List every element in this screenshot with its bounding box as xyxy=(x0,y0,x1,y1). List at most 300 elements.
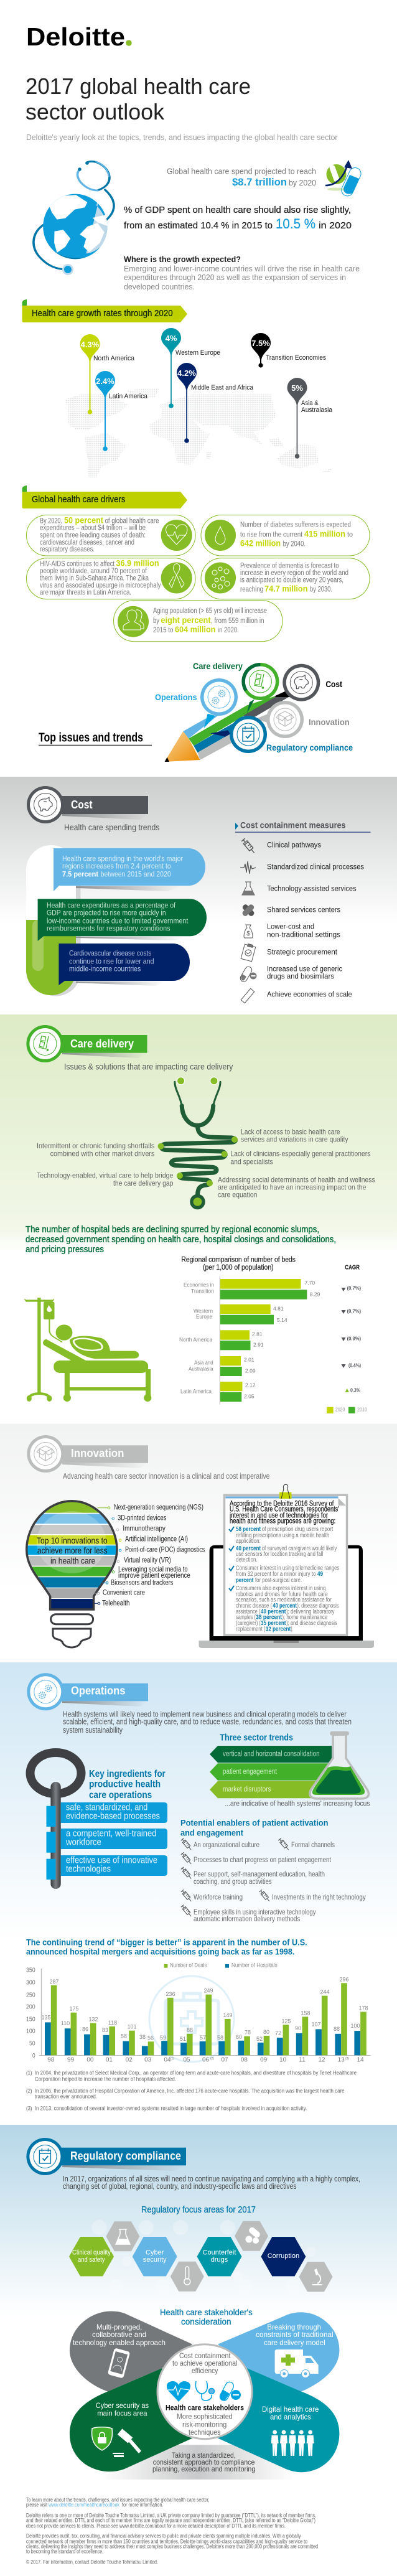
list: top 10 innovations with connectors: Next-generation sequencing (NGS) xyxy=(114,1504,203,1512)
icon: patient in hospital bed xyxy=(24,1298,151,1402)
survey bullet: robotics and drones: ); delivering laboratory xyxy=(286,1609,335,1616)
card: HIV-AIDS: are major threats in Latin America. xyxy=(40,589,131,597)
value labels: 175 xyxy=(69,2006,79,2012)
callout: cardiovascular disease costs: Cardiovascular disease costs xyxy=(69,950,152,958)
callout: expenditures as percentage of GDP: GDP are projected to rise more quickly in xyxy=(47,910,166,917)
hexagon: cyber security: security xyxy=(143,2256,167,2264)
callout: regional spending xyxy=(54,848,205,891)
value labels: 2.05 xyxy=(244,1393,255,1400)
panel: Regulatory compliance xyxy=(0,2125,397,2480)
value labels: 86 xyxy=(82,2026,88,2033)
subheading: issues and solutions: Issues & solutions that are impacting care delivery xyxy=(64,1062,233,1072)
list heading: Cost containment measures xyxy=(240,820,346,830)
heading: hospital beds: and pricing pressures xyxy=(26,1245,104,1255)
survey bullet: telemedicine: 49 xyxy=(317,1571,323,1578)
footnotes: (3) xyxy=(26,2105,32,2111)
callout: expenditures as percentage of GDP xyxy=(38,899,207,941)
survey bullet: robotics and drones: ); disease diagnosis xyxy=(297,1603,339,1609)
footer: disclaimer text: Deloitte refers to one or more of Deloitte Touche Tohmatsu Limited, a UK private company limited by guarantee ("DTTL"), its network of member firms, xyxy=(26,2513,316,2519)
survey bullet: telemedicine: percent xyxy=(236,1577,254,1584)
card: dementia: Prevalence of dementia is forecast to xyxy=(240,563,339,570)
value labels xyxy=(41,1976,368,2042)
hexagon: cyber security: Cyber xyxy=(146,2249,164,2256)
badge: Regulatory compliance xyxy=(230,716,267,753)
value labels: 107 xyxy=(311,2021,321,2027)
item: technology-assisted services: Technology-assisted services xyxy=(267,886,357,893)
hexagon: counterfeit drugs xyxy=(197,2237,241,2276)
section header: Cost: Cost xyxy=(71,799,93,811)
value labels: 52 xyxy=(256,2036,263,2042)
text: GDP statement: % of GDP spent on health care should also rise slightly, xyxy=(124,205,351,215)
card: diabetes xyxy=(201,515,370,556)
pin: Latin America 2.4%: Latin America xyxy=(109,393,148,400)
value labels: 132 xyxy=(88,2016,98,2023)
icon: gavel xyxy=(113,2428,141,2457)
icon: ambulance xyxy=(275,2349,319,2377)
callout: cardiovascular disease costs: continue to rise for lower and xyxy=(69,958,154,965)
heading: hospital beds: The number of hospital beds are declining spurred by regional economic slumps, xyxy=(26,1225,319,1235)
survey bullet: robotics and drones: 35 percent xyxy=(261,1620,286,1627)
logo: Deloitte: Deloitte xyxy=(26,22,125,51)
callout: cardiovascular disease costs xyxy=(58,944,190,986)
item: shared services centers xyxy=(241,904,340,917)
heading ribbon: drivers: Global health care drivers xyxy=(32,494,126,505)
hexagon: corruption xyxy=(261,2237,306,2276)
list items xyxy=(181,1838,366,1923)
callout: expenditures as percentage of GDP: Health care expenditures as a percentage of xyxy=(47,902,176,910)
text: regulatory intro xyxy=(63,2175,360,2191)
CAGR values: (0.7%) xyxy=(347,1286,361,1291)
footnotes: transaction ever announced. xyxy=(35,2094,97,2100)
category labels: Asia and xyxy=(194,1360,213,1367)
item: lower-cost settings xyxy=(244,924,340,939)
text: spend projection: $8.7 trillion xyxy=(232,176,287,188)
card: dementia: is anticipated to double every 20 years, xyxy=(240,577,343,584)
section header: Care delivery xyxy=(26,1025,147,1062)
card: dementia: 74.7 million xyxy=(264,584,307,594)
text: stethoscope callouts: and specialists xyxy=(230,1158,273,1166)
item: clinical pathways xyxy=(241,838,321,855)
survey bullet: 40 percent: of surveyed caregivers would likely xyxy=(262,1545,337,1552)
footer: disclaimer text: to becoming the standard of excellence. xyxy=(26,2549,103,2555)
card: HIV-AIDS: them living in Sub-Sahara Africa. The Zika xyxy=(40,575,149,583)
y axis xyxy=(26,1967,35,2059)
survey bullet: robotics and drones: robotics and drones for future health care xyxy=(236,1591,328,1598)
lobe: cyber security focus: main focus area xyxy=(97,2409,147,2418)
subtitle: Deloitte's yearly look at the topics, trends, and issues impacting the global health care sector xyxy=(26,133,338,142)
card: causes of death: respiratory diseases. xyxy=(40,546,95,553)
panel: Care delivery xyxy=(0,1014,397,1424)
pin: Middle East and Africa 4.2%: Middle East and Africa xyxy=(191,384,254,391)
list items: Investments in the right technology xyxy=(272,1894,366,1901)
badge: Innovation xyxy=(266,701,304,738)
list: top 10 innovations with connectors: Point-of-care (POC) diagnostics xyxy=(125,1547,205,1554)
card: HIV-AIDS xyxy=(26,558,195,599)
text: standardized approach: planning, execution and monitoring xyxy=(152,2465,255,2473)
title: sector outlook xyxy=(26,99,165,124)
list: top 10 innovations with connectors: improve patient experience xyxy=(118,1572,190,1580)
bars: number of deals xyxy=(51,1983,367,2055)
labels for the five topics xyxy=(155,661,353,752)
survey bullet: robotics and drones: Consumers also express interest in using xyxy=(236,1585,325,1592)
item: generics: drugs and biosimilars xyxy=(267,973,334,981)
pin: Western Europe 4%: Western Europe xyxy=(175,349,220,357)
illustration: winding stethoscope xyxy=(158,1077,238,1209)
pin: North America 4.3%: North America xyxy=(93,355,135,362)
item: strategic procurement: Strategic procurement xyxy=(267,949,338,957)
heading: bigger is better xyxy=(26,1937,307,1957)
icon hexagon: flask xyxy=(106,2221,139,2251)
value labels: 4.81 xyxy=(273,1306,284,1312)
card: dementia: by 2030. xyxy=(310,586,332,594)
survey bullet: robotics and drones: ); home maintenance xyxy=(283,1614,327,1621)
CAGR values xyxy=(341,1286,361,1393)
icon: flask xyxy=(310,1731,368,1799)
arrow: patient engagement: patient engagement xyxy=(223,1768,278,1776)
pin: Asia and Australasia 5%: 5% xyxy=(291,383,303,393)
centre circle: health care stakeholders xyxy=(157,2344,252,2439)
category labels xyxy=(179,1282,214,1395)
lobe: multi-pronged approach xyxy=(73,2323,166,2379)
chart title: Regional comparison of number of beds xyxy=(181,1257,296,1264)
list: potential enablers xyxy=(180,1818,366,1923)
survey bullet: robotics and drones: ). xyxy=(291,1626,293,1633)
badge: Cost xyxy=(283,664,320,701)
text: standardized approach: Taking a standardized, xyxy=(172,2451,235,2460)
lobe: cyber security focus: Cyber security as xyxy=(96,2401,149,2410)
list items: Workforce training xyxy=(194,1894,243,1901)
infographic: three sector trends: ...are indicative of health systems' increasing focus xyxy=(225,1799,370,1808)
heading ribbon: growth rates: Health care growth rates through 2020 xyxy=(32,308,173,319)
x axis: 13 xyxy=(338,2057,345,2064)
x axis: 12 xyxy=(318,2057,325,2064)
text: GDP statement: from an estimated 10.4 % in 2015 to xyxy=(124,220,273,231)
value labels: 178 xyxy=(358,2005,368,2012)
x axis: (3) xyxy=(345,2057,349,2061)
x axis: 04 xyxy=(164,2057,171,2064)
arrow: market disruptors xyxy=(210,1781,332,1798)
value labels: 58 xyxy=(217,2035,223,2041)
pin: North America 4.3%: 4.3% xyxy=(81,340,100,349)
value labels: 2.09 xyxy=(245,1368,256,1374)
text: regulatory intro: changing set of global, regional, country, and industry-specific laws and directives xyxy=(63,2182,297,2191)
y axis: 300 xyxy=(26,1979,35,1987)
card: aging population: in 2020. xyxy=(218,627,239,634)
diagram: health care stakeholder's consideration xyxy=(70,2307,339,2480)
illustration: pencil with five topic badges xyxy=(155,661,353,762)
value labels: 158 xyxy=(301,2010,311,2016)
pin: Asia and Australasia 5% xyxy=(287,378,333,459)
tag: processes: safe, standardized, and xyxy=(66,1802,147,1812)
value labels: 244 xyxy=(320,1989,330,1995)
text: stethoscope callouts xyxy=(37,1128,375,1199)
tag: processes xyxy=(46,1802,167,1827)
value labels: 118 xyxy=(108,2020,117,2026)
footer: disclaimer text xyxy=(26,2497,318,2565)
value labels: 88 xyxy=(334,2026,340,2032)
icon: heart xyxy=(167,2381,190,2402)
category labels: North America xyxy=(179,1337,213,1344)
icon: shield with padlock xyxy=(92,2427,112,2450)
card heading: According to the Deloitte 2016 Survey of xyxy=(230,1500,334,1507)
section header: Operations: Operations xyxy=(71,1685,126,1697)
footer: disclaimer text: does not provide services to clients. Please see www.deloitte.com/about for a more detailed description of DTTL and its member firms. xyxy=(26,2523,286,2529)
value labels: 125 xyxy=(281,2018,291,2024)
text: standardized approach: consistent approach to compliance xyxy=(153,2458,255,2466)
category labels: Latin America xyxy=(180,1389,212,1395)
card: aging population: 604 million xyxy=(175,624,215,634)
heading: bigger is better: announced hospital mergers and acquisitions going back as far as 1998. xyxy=(26,1947,294,1957)
labels for the five topics: Operations xyxy=(155,692,197,702)
item: lower-cost settings: non-traditional settings xyxy=(267,932,340,939)
heading: top issues and trends: Top issues and trends xyxy=(39,731,143,745)
callout: regional spending: 7.5 percent xyxy=(62,871,98,879)
value labels: 78 xyxy=(245,2030,251,2036)
text: spend projection: Global health care spend projected to reach xyxy=(167,167,316,176)
pin: Western Europe 4% xyxy=(161,328,220,408)
footnotes: In 2006, the privatization of Hospital Corporation of America, Inc. affected 176 acute-care hospitals. The acquisition was the largest health care xyxy=(35,2087,345,2094)
list heading: Potential enablers of patient activation xyxy=(180,1818,329,1828)
survey bullet: 40 percent: use sensors for location tracking and fall xyxy=(236,1551,323,1558)
text: stethoscope callouts: Intermittent or chronic funding shortfalls xyxy=(37,1141,154,1150)
centre circle: health care stakeholders: risk-monitoring xyxy=(182,2420,227,2428)
card: diabetes: to xyxy=(347,532,353,539)
card: aging population: Aging population (> 65 yrs old) will increase xyxy=(153,607,267,615)
x axis: 05 xyxy=(183,2057,190,2064)
value labels: 149 xyxy=(223,2012,233,2018)
heading: key ingredients: productive health xyxy=(89,1779,161,1790)
value labels: 57 xyxy=(200,2035,206,2041)
lobe: breaking through constraints: care delivery model xyxy=(264,2338,325,2347)
value labels: 51 xyxy=(180,2036,186,2042)
subheading: spending trends: Health care spending trends xyxy=(64,822,159,832)
footer: disclaimer text: connected network of member firms in more than 150 countries and territories, Deloitte brings world-class capabilities and high-quality service to xyxy=(26,2539,307,2545)
survey bullet: 58 percent: refilling prescriptions using a mobile health xyxy=(236,1532,329,1539)
y axis: 350 xyxy=(26,1967,35,1974)
value labels: 2.12 xyxy=(245,1382,256,1389)
icon: pill with arrow xyxy=(325,160,363,198)
lobe: multi-pronged approach: collaborative and xyxy=(92,2330,146,2339)
list: top 10 innovations with connectors: 3D-printed devices xyxy=(118,1515,167,1522)
tag: processes: evidence-based processes xyxy=(66,1812,160,1822)
x axis: 10 xyxy=(279,2057,287,2064)
category labels: Western xyxy=(194,1308,213,1315)
card: HIV-AIDS: virus and associated upsurge in microcephaly xyxy=(40,582,161,589)
survey bullet: robotics and drones: chronic disease ( xyxy=(236,1603,273,1609)
value labels: 88 xyxy=(187,2027,193,2033)
arrow: consolidation: vertical and horizontal consolidation xyxy=(223,1751,320,1758)
list: top 10 innovations with connectors xyxy=(95,1504,205,1607)
text: where is the growth expected: expenditures through 2020 as well as the expansion of services in xyxy=(124,273,346,282)
footnotes: Corporation helped to increase the number of hospitals affected. xyxy=(35,2076,176,2082)
value labels: 8.29 xyxy=(310,1291,320,1298)
badge: Operations xyxy=(200,678,238,716)
x axis xyxy=(47,2057,364,2064)
x axis: 01 xyxy=(106,2057,113,2064)
text: operating models intro: Health systems will likely need to implement new business and clinical operating models to deliver xyxy=(63,1710,347,1719)
survey bullet: robotics and drones: scenarios, such as medication assistance for xyxy=(236,1597,332,1604)
item: technology-assisted services xyxy=(242,882,357,895)
item: generics xyxy=(239,965,342,983)
y axis: 200 xyxy=(26,2004,35,2010)
value labels: 2.01 xyxy=(244,1357,255,1363)
pin: Western Europe 4%: 4% xyxy=(166,334,177,343)
footer: disclaimer text: for more information. xyxy=(122,2502,163,2508)
text: where is the growth expected: developed countries. xyxy=(124,282,195,291)
pin: Transition Economies 7.5% xyxy=(251,333,326,368)
card heading xyxy=(230,1500,339,1525)
section header: Innovation: Innovation xyxy=(71,1447,124,1459)
legend: 2010 xyxy=(357,1407,367,1413)
pin: Asia and Australasia 5%: Asia & xyxy=(301,400,319,407)
legend: 2020 xyxy=(335,1407,345,1413)
footer: disclaimer text: www.deloitte.com/healthcareoutlook xyxy=(48,2502,119,2508)
list: cost containment measures xyxy=(235,820,371,1003)
icon: binder clip xyxy=(279,1484,291,1499)
callout: regional spending: regions increases from 2.4 percent to xyxy=(62,863,171,871)
value labels: 100 xyxy=(350,2023,360,2029)
footer: disclaimer text: please visit xyxy=(26,2502,47,2508)
text: spend projection xyxy=(167,167,316,188)
chart title: CAGR xyxy=(345,1264,360,1271)
bars: number of hospitals xyxy=(45,2022,360,2055)
card: HIV-AIDS: HIV-AIDS continues to affect xyxy=(40,560,115,568)
lobe: digital health care and analytics: Digital health care xyxy=(262,2405,319,2414)
centre circle: health care stakeholders: Health care stakeholders xyxy=(166,2404,244,2412)
illustration: light bulb of top 10 innovations: Top 10 innovations to xyxy=(37,1535,108,1545)
infographic: three sector trends xyxy=(210,1731,370,1808)
list: top 10 innovations with connectors: Artificial intelligence (AI) xyxy=(125,1536,188,1543)
x axis: 98 xyxy=(47,2057,55,2064)
item: clinical pathways: Clinical pathways xyxy=(267,842,321,850)
x axis: 08 xyxy=(241,2057,248,2064)
chart title: (per 1,000 of population) xyxy=(203,1264,274,1272)
category labels: Economies in xyxy=(184,1282,214,1289)
pin: Middle East and Africa 4.2% xyxy=(177,363,254,443)
survey bullet: 58 percent: of prescription drug users report xyxy=(262,1526,333,1533)
list items: Processes to chart progress on patient engagement xyxy=(194,1857,332,1864)
tag: workforce xyxy=(46,1829,167,1853)
value labels: 56 xyxy=(147,2035,154,2041)
item: strategic procurement xyxy=(241,943,338,962)
callout: regional spending: Health care spending in the world's major xyxy=(62,855,183,863)
survey bullet: telemedicine: Consumer interest in using telemedicine ranges xyxy=(236,1565,339,1572)
x axis: 02 xyxy=(126,2057,133,2064)
item: lower-cost settings: $ xyxy=(246,930,250,937)
value labels: 80 xyxy=(263,2029,269,2035)
survey bullet: 58 percent xyxy=(229,1526,333,1545)
heading: key ingredients: Key ingredients for xyxy=(89,1769,166,1779)
y axis: 150 xyxy=(26,2016,35,2023)
footer: disclaimer text: © 2017. For information, contact Deloitte Touche Tohmatsu Limited. xyxy=(26,2559,158,2565)
panel: Cost xyxy=(0,777,397,1014)
list: top 10 innovations with connectors: Virtual reality (VR) xyxy=(124,1557,171,1565)
text: stethoscope callouts: Addressing social determinants of health and wellness xyxy=(218,1176,375,1184)
list items: Peer support, self-management education, health xyxy=(194,1871,325,1878)
list heading xyxy=(235,820,371,833)
legend xyxy=(164,1962,278,1969)
x axis: (2) xyxy=(210,2057,214,2061)
text: GDP statement: in 2020 xyxy=(319,220,352,231)
hexagon: clinical quality and safety: Clinical quality xyxy=(72,2249,111,2256)
card: aging population: eight percent xyxy=(161,615,211,625)
badge: Care delivery xyxy=(241,663,279,700)
section header: Innovation xyxy=(27,1435,148,1473)
survey bullet: robotics and drones: replacement ( xyxy=(236,1626,266,1633)
map: dotted world map with growth pins xyxy=(65,328,333,478)
text: stethoscope callouts: Lack of access to basic health care xyxy=(241,1128,340,1136)
tag: workforce: workforce xyxy=(65,1838,101,1848)
card: aging population: , from 559 million in xyxy=(211,617,264,625)
labels for the five topics: Innovation xyxy=(309,717,350,727)
value labels xyxy=(244,1280,320,1400)
list: top 10 innovations with connectors: Convenient care xyxy=(103,1590,145,1597)
legend: Number of Hospitals xyxy=(231,1962,278,1969)
survey bullet: 40 percent: 40 percent xyxy=(236,1545,261,1552)
tag: technologies: effective use of innovative xyxy=(66,1855,157,1865)
icon hexagon: pills xyxy=(235,2221,268,2251)
centre circle: health care stakeholders: Cost containment xyxy=(179,2351,231,2360)
bars xyxy=(220,1279,307,1402)
section header: Regulatory compliance: Regulatory compliance xyxy=(70,2150,181,2162)
text: GDP statement xyxy=(124,205,352,232)
value labels: 7.70 xyxy=(305,1280,315,1286)
y axis: 100 xyxy=(26,2028,35,2035)
value labels: 58 xyxy=(121,2033,127,2040)
hexagons: regulatory focus areas xyxy=(69,2220,332,2293)
centre circle: health care stakeholders: to achieve operational xyxy=(172,2359,237,2368)
text: where is the growth expected: Emerging and lower-income countries will drive the rise in health care xyxy=(124,264,360,273)
lobe: breaking through constraints xyxy=(256,2323,334,2377)
text: stethoscope callouts: services and variations in care quality xyxy=(241,1135,348,1144)
heading ribbon: drivers xyxy=(22,485,187,508)
labels for the five topics: Cost xyxy=(325,679,342,689)
labels for the five topics: Regulatory compliance xyxy=(266,742,353,752)
lobe: multi-pronged approach: Multi-pronged, xyxy=(96,2323,142,2331)
pin: Latin America 2.4% xyxy=(95,371,148,451)
value labels: 60 xyxy=(236,2034,242,2040)
lobe: multi-pronged approach: technology enabled approach xyxy=(73,2338,166,2347)
icon hexagon: thermometer xyxy=(170,2262,204,2292)
chart: hospital mergers and acquisitions xyxy=(26,1962,371,2064)
value labels: 38 xyxy=(139,2034,146,2040)
heading: bigger is better: The continuing trend of “bigger is better” is apparent in the number of U.S. xyxy=(26,1937,307,1947)
card: diabetes: Number of diabetes sufferers is expected xyxy=(240,522,351,529)
text: stethoscope callouts: Technology-enabled, virtual care to help bridge xyxy=(37,1171,174,1180)
footnotes xyxy=(26,2069,357,2111)
list items: automatic information delivery methods xyxy=(194,1916,301,1923)
pin: Transition Economies 7.5%: 7.5% xyxy=(251,339,270,348)
survey bullet: telemedicine xyxy=(229,1565,339,1584)
value labels: 110 xyxy=(61,2020,70,2026)
survey bullet: 40 percent: detection. xyxy=(236,1557,258,1563)
x axis: 09 xyxy=(260,2057,268,2064)
card: diabetes: to rise from the current xyxy=(240,532,303,539)
chart: regional comparison of number of beds xyxy=(179,1257,367,1413)
list: top 10 innovations with connectors: Telehealth xyxy=(102,1599,129,1607)
hexagon: cyber security xyxy=(133,2237,177,2276)
value labels: 249 xyxy=(203,1988,213,1994)
callout: expenditures as percentage of GDP: reimbursements for respiratory conditions xyxy=(47,925,170,933)
heading: hospital beds: decreased government spending on health care, hospital closings and consolidations, xyxy=(26,1235,336,1245)
heading: key ingredients: care operations xyxy=(89,1790,152,1801)
x axis: 99 xyxy=(67,2057,75,2064)
footnotes: In 2004, the privatization of Select Medical Corp., an operator of long-term and acute-care hospitals, and divestiture of hospitals by Tenet Healthcare xyxy=(35,2069,357,2076)
x axis: 00 xyxy=(86,2057,94,2064)
hexagon: corruption: Corruption xyxy=(268,2252,299,2260)
illustration: light bulb of top 10 innovations: achieve more for less xyxy=(37,1545,108,1555)
centre circle: health care stakeholders: techniques xyxy=(189,2428,220,2437)
